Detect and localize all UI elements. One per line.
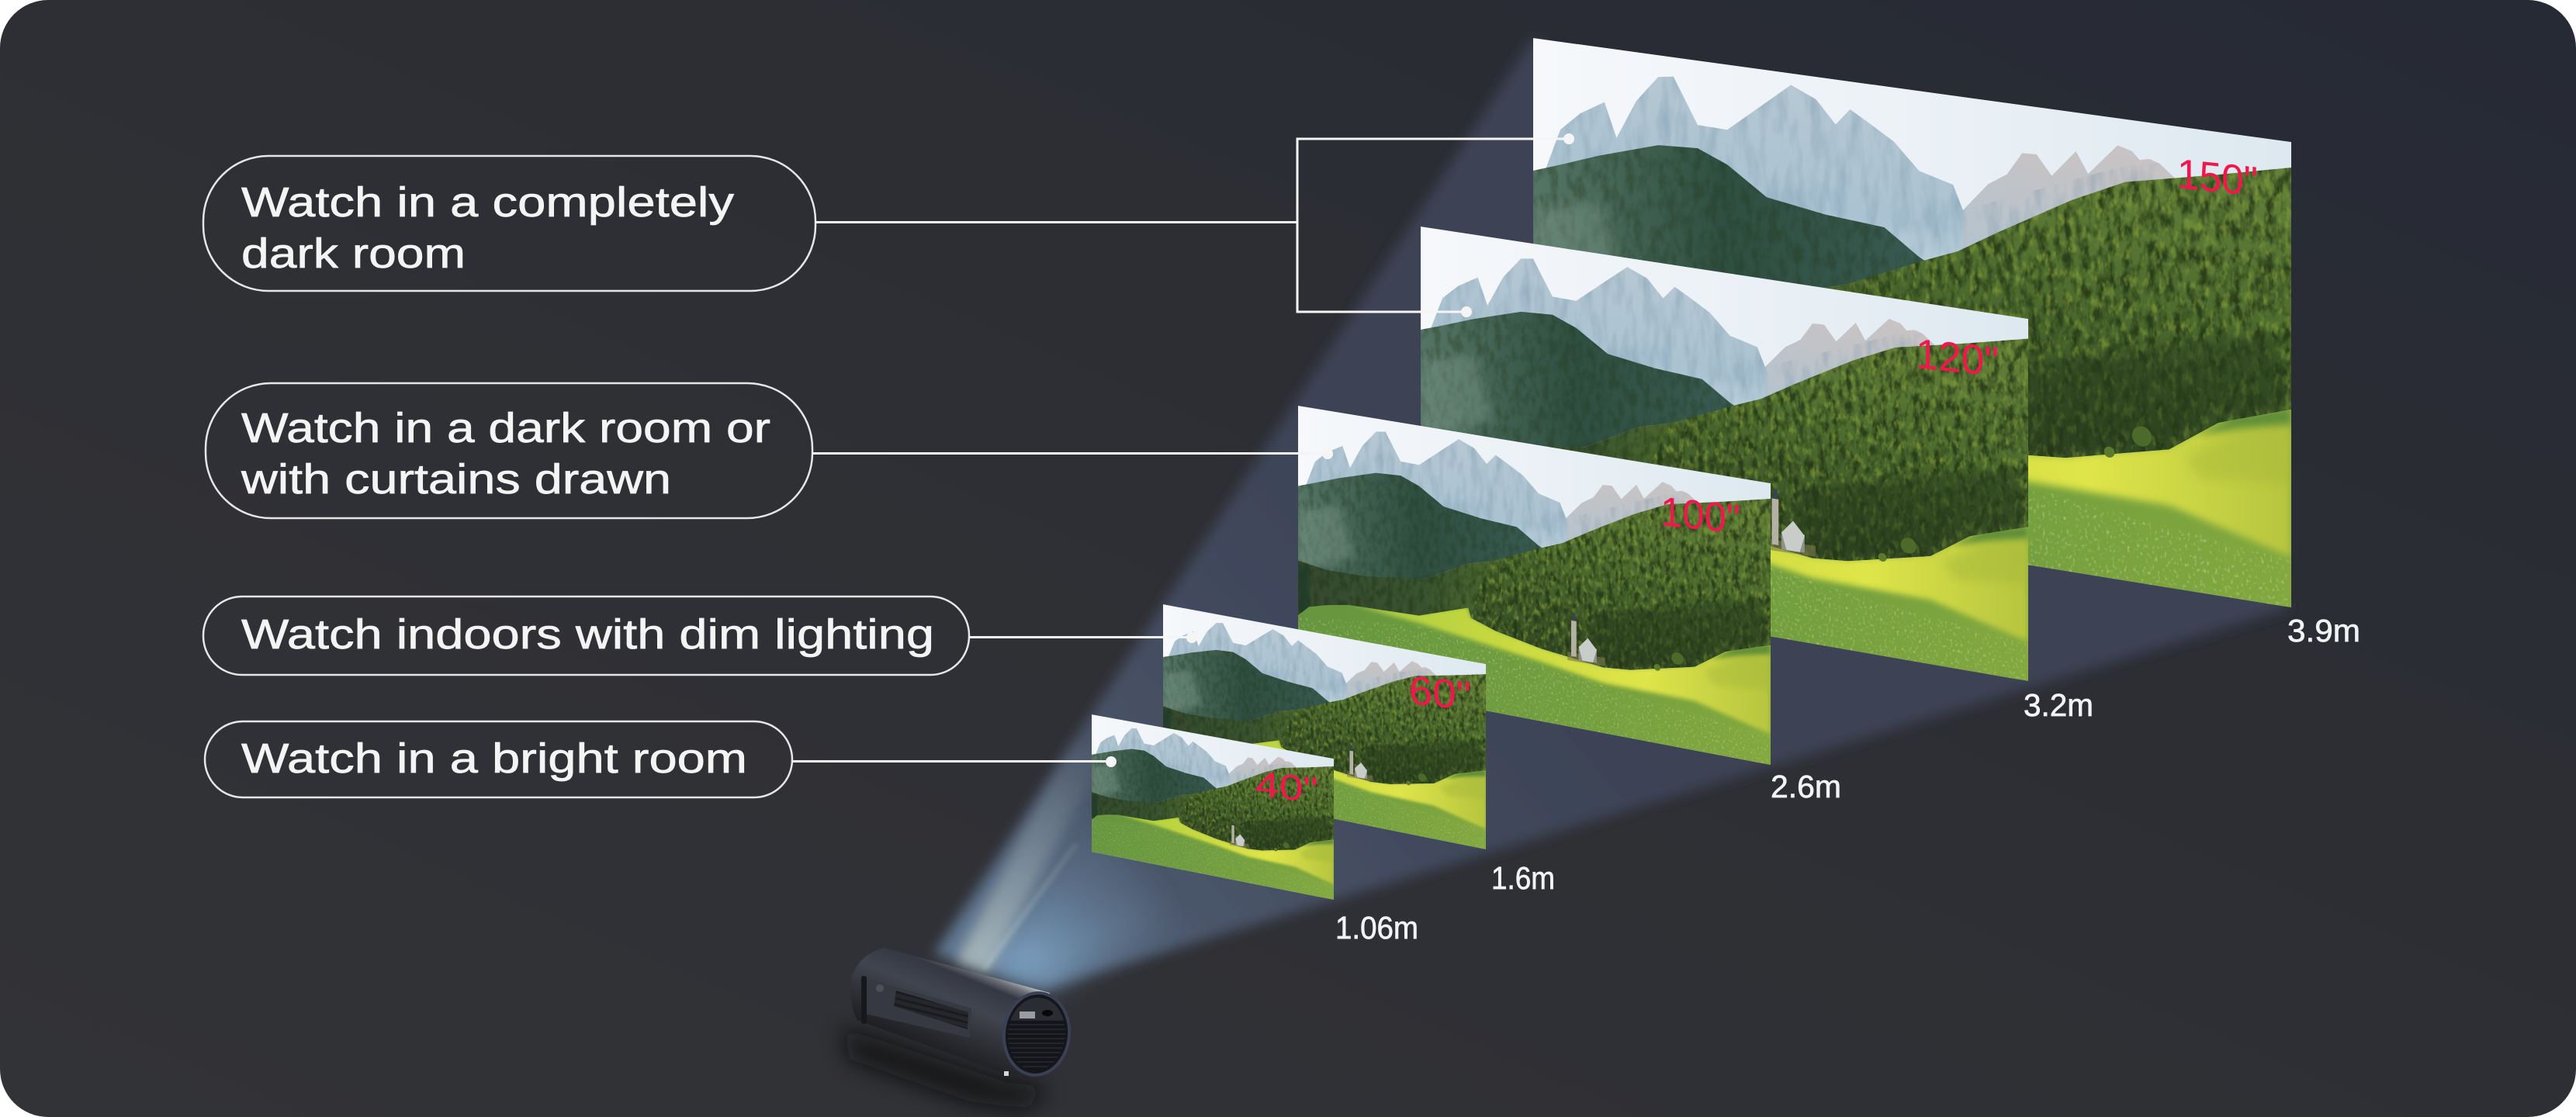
distance label: 1.6m: 1.6m [1491,860,1555,896]
projector shadow [842,1028,1047,1109]
callout: indoors with dim lighting: Watch indoors with dim lighting [241,611,934,658]
callout: bright room [205,721,792,797]
callout: completely dark room: Watch in a completely [241,179,734,226]
side panel and vent [861,976,971,1038]
projector body [850,948,1050,1077]
leader line: 60 inch [969,632,1197,643]
leader line: 100 inch [812,448,1333,459]
size label: 120 inch: 120" [1916,330,1999,386]
distance label: 2.6m: 2.6m [1771,769,1841,804]
callout: bright room: Watch in a bright room [241,735,747,782]
callout: dark room or curtains: with curtains drawn [241,456,671,503]
size label: 60 inch: 60" [1409,668,1471,719]
callout: dark room or curtains: Watch in a dark room or [241,405,770,451]
screen: 150 inch [1533,38,2291,607]
screen: 40 inch [1092,714,1334,900]
distance label: 3.2m: 3.2m [2024,687,2093,723]
size label: 100 inch: 100" [1660,489,1740,543]
size label: 40 inch: 40" [1255,763,1318,810]
distance label: 1.06m: 1.06m [1335,910,1418,946]
screen: 120 inch [1421,227,2028,681]
screen: 100 inch [1298,406,1771,765]
front face [1002,991,1071,1077]
distance label: 3.9m: 3.9m [2287,613,2360,648]
callout: dark room or curtains [206,383,812,518]
status dot [1004,1071,1009,1076]
callout: completely dark room [203,156,815,291]
screen: 60 inch [1163,604,1486,849]
callout: indoors with dim lighting [203,597,969,675]
leader line: 40 inch [792,756,1117,767]
leader line: 120 and 150 inch bracket [815,133,1574,317]
light beam from projector [934,38,2291,989]
size label: 150 inch: 150" [2177,150,2258,206]
callout: completely dark room: dark room [241,230,466,277]
projector [842,948,1075,1109]
